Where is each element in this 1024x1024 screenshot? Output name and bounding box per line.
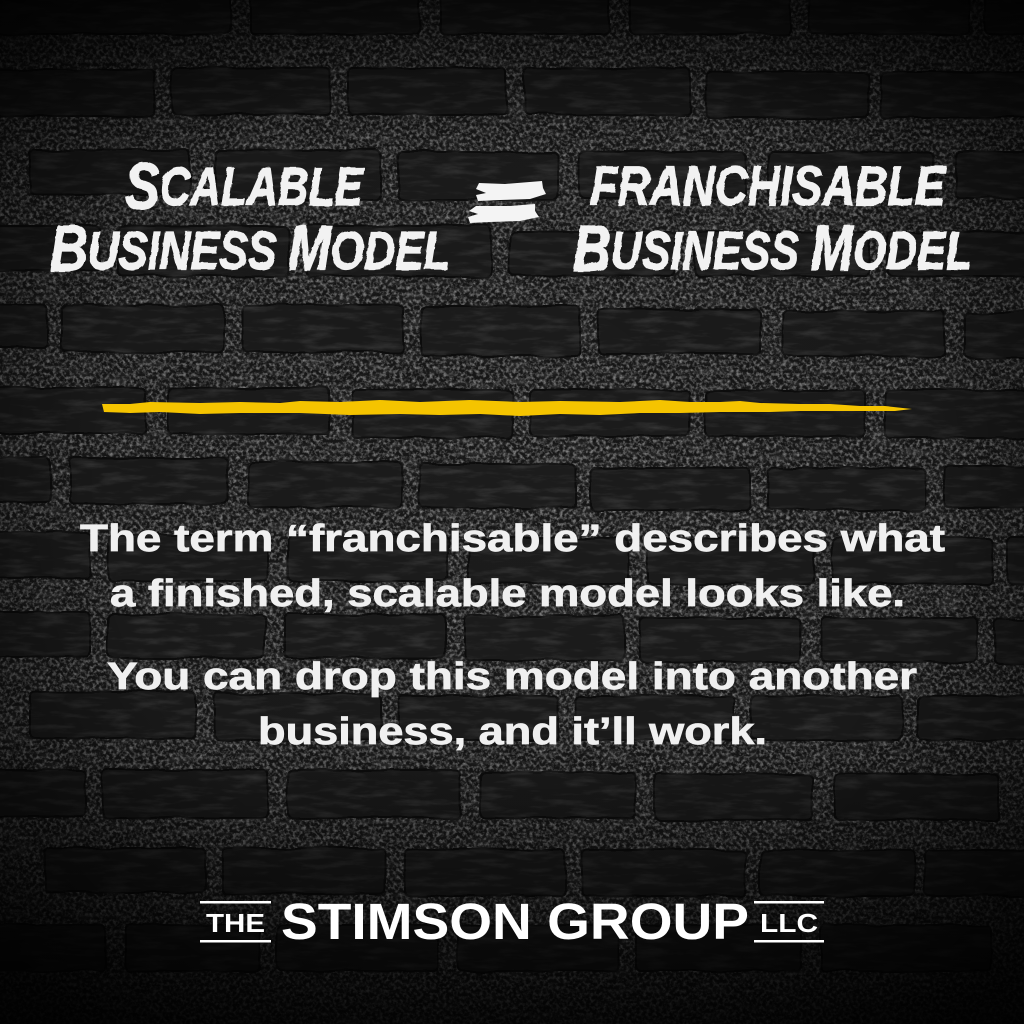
icon: brushed equals sign — [468, 181, 546, 223]
heading: scalable business model: B — [50, 211, 88, 285]
body text: drop in model — [107, 656, 917, 753]
heading: franchisable business model: FRANCHISABLE — [590, 154, 946, 217]
body text: franchisable definition — [80, 518, 945, 615]
divider: yellow brush stroke — [102, 400, 912, 416]
heading: scalable business model — [50, 149, 450, 285]
heading: franchisable business model: M — [811, 212, 854, 284]
heading: scalable business model: CALABLE — [160, 157, 365, 217]
body text: franchisable definition: a finished, scalable model looks like. — [110, 573, 905, 615]
body text: drop in model: business, and it’ll work. — [258, 711, 767, 753]
heading: franchisable business model: B — [573, 211, 611, 285]
logo: The Stimson Group LLC: LLC — [760, 908, 818, 938]
heading: franchisable business model — [573, 154, 972, 285]
heading: scalable business model: S — [125, 149, 160, 223]
body text: franchisable definition: The term “franchisable” describes what — [80, 518, 945, 560]
heading: franchisable business model: USINESS — [611, 221, 811, 281]
logo: The Stimson Group LLC: THE — [206, 908, 265, 938]
body text: drop in model: You can drop this model into another — [107, 656, 917, 698]
heading: scalable business model: USINESS — [88, 221, 288, 281]
logo: The Stimson Group LLC: STIMSON GROUP — [281, 893, 749, 950]
heading: scalable business model: M — [288, 212, 332, 284]
logo: The Stimson Group LLC — [200, 893, 824, 950]
heading: franchisable business model: ODEL — [853, 221, 972, 281]
heading: scalable business model: ODEL — [331, 221, 450, 281]
